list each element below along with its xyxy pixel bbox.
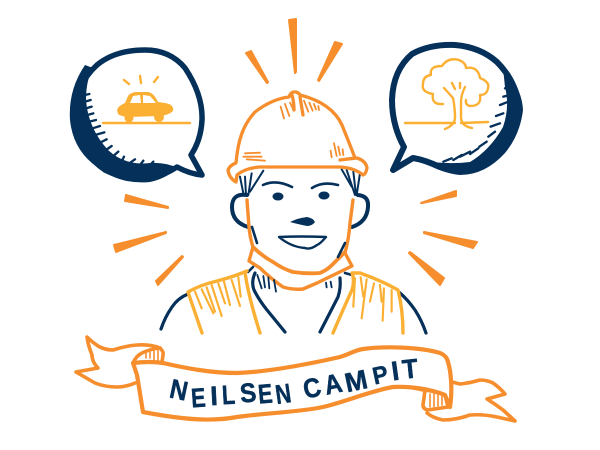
ribbon left tail <box>76 337 163 387</box>
bubble shadow right <box>420 68 523 175</box>
ribbon main band <box>133 347 451 420</box>
ribbon name text: S <box>239 378 258 409</box>
bubble outline right <box>392 45 519 170</box>
face and chin outline <box>247 200 353 289</box>
shading ticks right <box>443 88 510 162</box>
ribbon banner <box>76 337 515 421</box>
ribbon right curl <box>393 387 448 410</box>
ribbon right tail <box>427 380 515 421</box>
ribbon name text: M <box>342 364 370 398</box>
ribbon name text: T <box>401 353 419 385</box>
hat hatching <box>243 101 343 161</box>
ribbon name text: I <box>389 356 401 386</box>
ribbon name text: N <box>274 379 293 411</box>
rays to the left of the head <box>114 195 183 285</box>
mouth <box>279 236 326 249</box>
eyebrows <box>263 182 338 188</box>
ribbon left curl <box>133 348 160 363</box>
ribbon name text <box>167 353 419 414</box>
icon: tree <box>405 59 488 129</box>
ribbon name text: E <box>257 379 274 410</box>
person <box>161 92 426 333</box>
ribbon name text: L <box>221 380 236 411</box>
nose <box>290 217 315 226</box>
ribbon name text: P <box>370 361 391 391</box>
bubble outline left <box>75 50 202 178</box>
icon: car <box>103 76 190 123</box>
rays above the helmet <box>246 19 342 83</box>
neck hatching <box>257 275 332 292</box>
ribbon name text: A <box>322 369 345 401</box>
jaw and neck lines <box>161 227 426 333</box>
hard hat <box>228 92 367 182</box>
shading ticks left <box>85 94 153 165</box>
safety vest <box>188 271 403 333</box>
ribbon name text: N <box>167 375 190 407</box>
ribbon name text: E <box>190 383 207 414</box>
eyes <box>272 192 330 200</box>
ears <box>232 195 368 227</box>
rays to the right of the head <box>409 191 477 285</box>
speech bubble: tree <box>392 45 523 175</box>
ribbon name text: C <box>301 373 324 405</box>
hair <box>240 169 360 195</box>
speech bubble: car <box>70 50 202 182</box>
ribbon name text: I <box>209 381 219 411</box>
bubble shadow left <box>70 65 178 182</box>
